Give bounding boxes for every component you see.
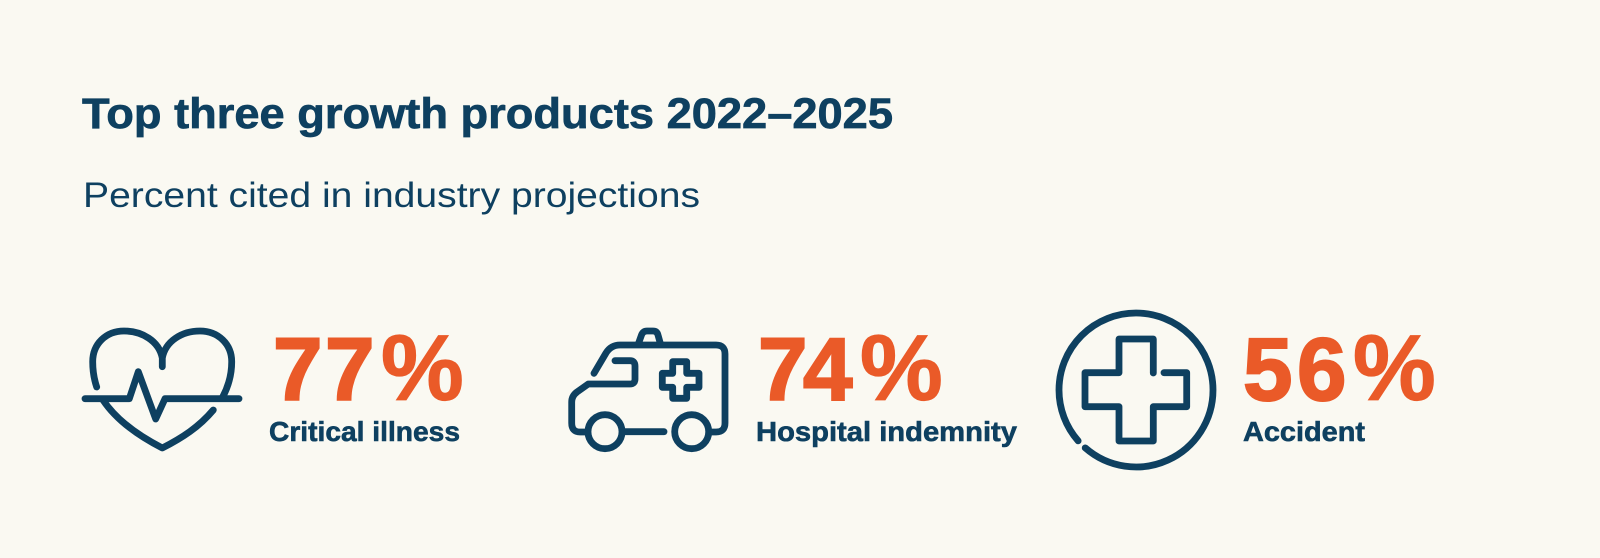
value: 74%: 4 <box>803 319 853 419</box>
value: 77%: 7 <box>273 319 322 419</box>
value: 74%: % <box>860 316 943 420</box>
stat: hospital indemnity <box>572 316 1017 449</box>
label: critical illness: Critical illness <box>269 416 460 447</box>
label: accident: Accident <box>1243 416 1365 447</box>
value: 74%: 7 <box>758 319 808 419</box>
icon: medical cross in circle <box>1059 313 1213 467</box>
value: 56%: 6 <box>1297 319 1346 419</box>
icon: ambulance <box>572 331 725 449</box>
label: hospital indemnity: Hospital indemnity <box>756 416 1017 447</box>
value: 56%: % <box>1353 316 1436 420</box>
title: Top three growth products 2022–2025 <box>82 90 893 138</box>
value: 56%: 5 <box>1243 319 1292 419</box>
value: 77%: % <box>381 316 464 420</box>
value: 77%: 7 <box>325 319 374 419</box>
icon: heart with pulse <box>85 331 239 448</box>
stat: critical illness <box>85 316 464 448</box>
stat: accident <box>1059 313 1436 467</box>
subtitle: Percent cited in industry projections <box>83 176 700 215</box>
